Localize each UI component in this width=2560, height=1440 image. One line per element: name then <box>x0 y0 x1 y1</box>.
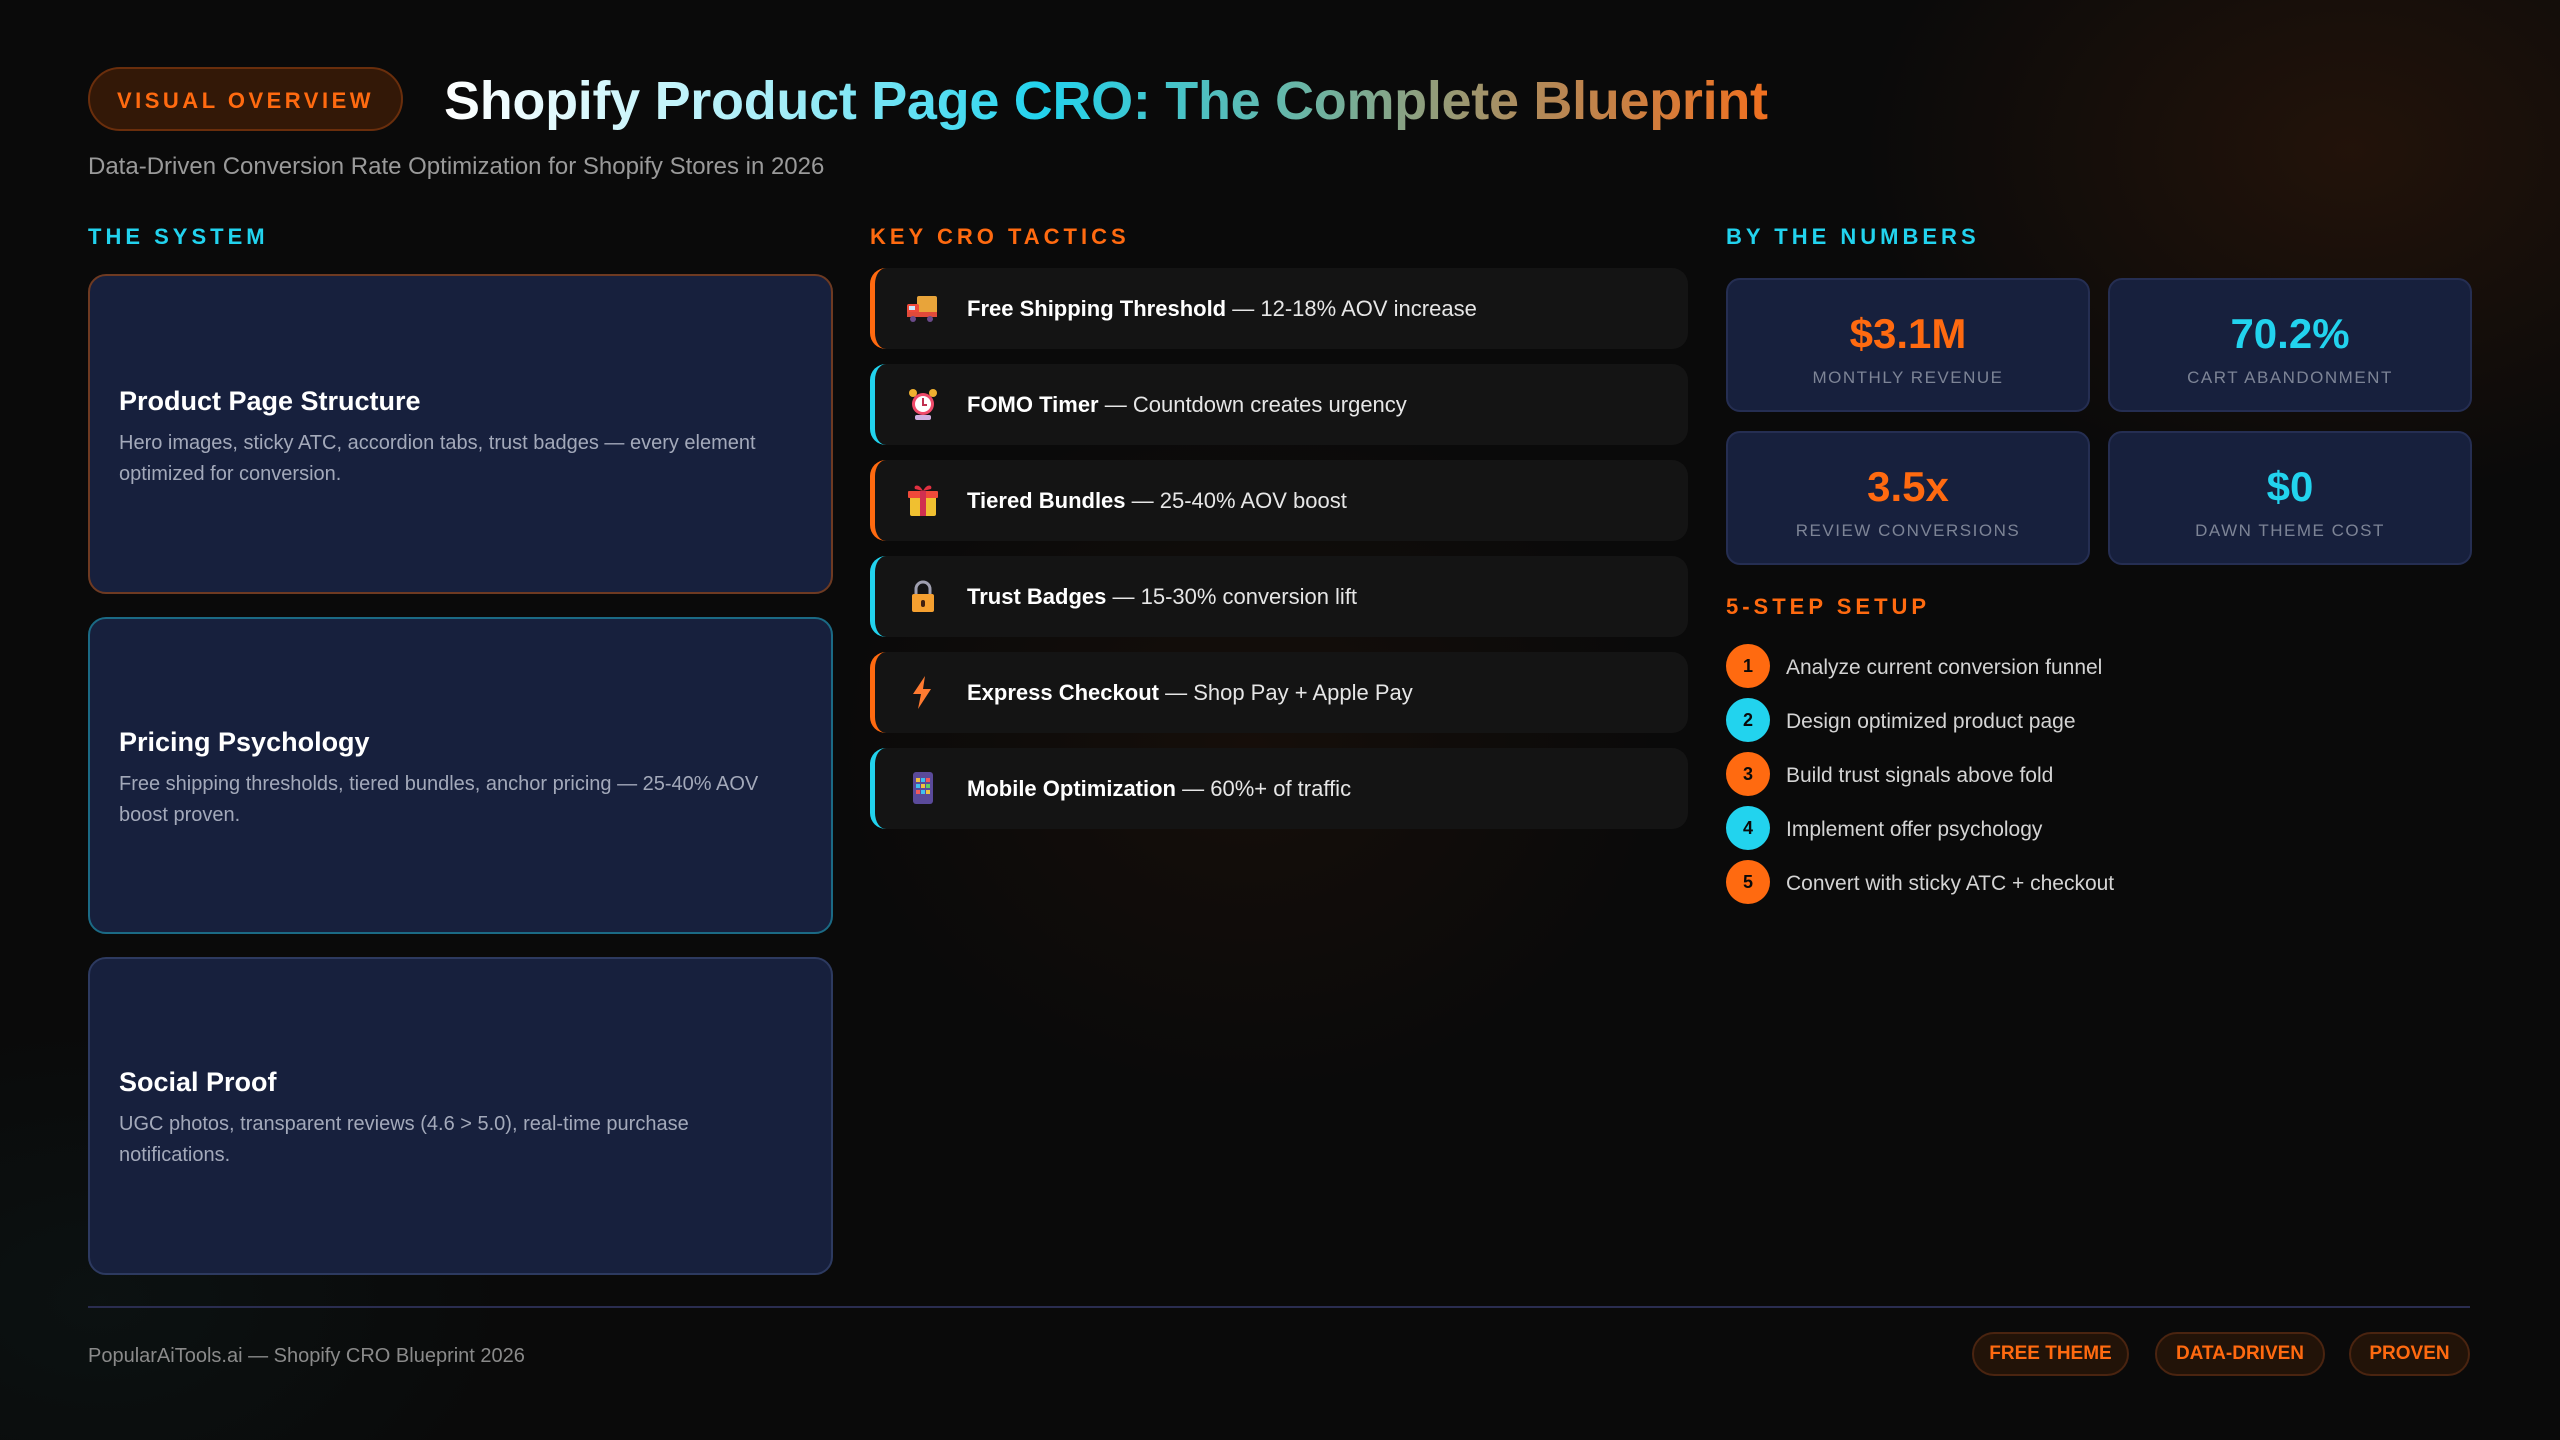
tag: free theme <box>1972 1332 2129 1376</box>
heading: key cro tactics: KEY CRO TACTICS <box>870 224 1130 249</box>
stat: cart abandonment: 70.2% <box>2230 310 2350 357</box>
stat: cart abandonment: CART ABANDONMENT <box>2187 368 2393 387</box>
step 2 <box>1726 698 2076 742</box>
tactic: trust badges <box>870 556 1688 637</box>
stat: cart abandonment <box>2108 278 2472 412</box>
stat: monthly revenue: MONTHLY REVENUE <box>1813 368 2003 387</box>
icon: phone <box>913 772 933 804</box>
icon: truck <box>907 296 937 322</box>
text: 5 <box>1743 872 1753 892</box>
stat: dawn theme cost <box>2108 431 2472 565</box>
stat: dawn theme cost: $0 <box>2267 463 2313 510</box>
stat: review conversions: REVIEW CONVERSIONS <box>1796 521 2020 540</box>
footer text: PopularAiTools.ai — Shopify CRO Blueprint 2026 <box>88 1345 525 1367</box>
icon: lightning <box>913 676 931 709</box>
tag: free theme: FREE THEME <box>1989 1343 2112 1364</box>
heading: by the numbers: BY THE NUMBERS <box>1726 224 1980 249</box>
tactic: mobile optimization: Mobile Optimization — 60%+ of traffic <box>967 776 1351 801</box>
step 1 <box>1726 644 2102 688</box>
step 3 <box>1726 752 2053 796</box>
tactic: tiered bundles <box>870 460 1688 541</box>
text: 3 <box>1743 764 1753 784</box>
heading: 5-step setup: 5-STEP SETUP <box>1726 594 1930 619</box>
stat: review conversions: 3.5x <box>1867 463 1949 510</box>
stat: monthly revenue: $3.1M <box>1850 310 1966 357</box>
stat: monthly revenue <box>1726 278 2090 412</box>
text: Analyze current conversion funnel <box>1786 656 2102 679</box>
panel: product page structure <box>88 274 833 594</box>
tactic: mobile optimization <box>870 748 1688 829</box>
tag: data-driven <box>2155 1332 2325 1376</box>
title: Shopify Product Page CRO: The Complete Blueprint <box>444 71 1768 131</box>
tactic: free shipping: Free Shipping Threshold — 12-18% AOV increase <box>967 296 1477 321</box>
stat: dawn theme cost: DAWN THEME COST <box>2195 521 2385 540</box>
subtitle: Data-Driven Conversion Rate Optimization for Shopify Stores in 2026 <box>88 153 824 180</box>
tactic: fomo timer <box>870 364 1688 445</box>
badge: visual overview <box>88 67 403 131</box>
heading: the system: THE SYSTEM <box>88 224 269 249</box>
icon: gift <box>908 486 938 516</box>
tactic: express checkout: Express Checkout — Shop Pay + Apple Pay <box>967 680 1413 705</box>
panel: pricing psychology: Pricing Psychology <box>119 727 370 757</box>
panel: product page structure: Hero images, sticky ATC, accordion tabs, trust badges — every element optimized for conversion. <box>119 432 756 485</box>
icon: lock <box>912 580 934 612</box>
tag: proven: PROVEN <box>2369 1343 2450 1364</box>
text: 1 <box>1743 656 1753 676</box>
badge: visual overview: VISUAL OVERVIEW <box>117 88 374 113</box>
tactic: express checkout <box>870 652 1688 733</box>
tactic: trust badges: Trust Badges — 15-30% conversion lift <box>967 584 1357 609</box>
panel: social proof: Social Proof <box>119 1067 277 1097</box>
text: Build trust signals above fold <box>1786 764 2053 787</box>
tactic: fomo timer: FOMO Timer — Countdown creates urgency <box>967 392 1407 417</box>
panel: pricing psychology: Free shipping thresholds, tiered bundles, anchor pricing — 25-40% AOV boost proven. <box>119 773 758 826</box>
tag: data-driven: DATA-DRIVEN <box>2176 1343 2304 1364</box>
panel: social proof: UGC photos, transparent reviews (4.6 > 5.0), real-time purchase notifications. <box>119 1113 689 1166</box>
text: 4 <box>1743 818 1753 838</box>
tactic: free shipping <box>870 268 1688 349</box>
tag: proven <box>2349 1332 2470 1376</box>
panel: pricing psychology <box>88 617 833 934</box>
icon: alarm clock <box>909 389 937 420</box>
panel: product page structure: Product Page Structure <box>119 386 421 416</box>
text: Convert with sticky ATC + checkout <box>1786 872 2114 895</box>
stat: review conversions <box>1726 431 2090 565</box>
text: 2 <box>1743 710 1753 730</box>
text: Implement offer psychology <box>1786 818 2042 841</box>
panel: social proof <box>88 957 833 1275</box>
step 4 <box>1726 806 2042 850</box>
text: Design optimized product page <box>1786 710 2076 733</box>
tactic: tiered bundles: Tiered Bundles — 25-40% AOV boost <box>967 488 1347 513</box>
step 5 <box>1726 860 2114 904</box>
